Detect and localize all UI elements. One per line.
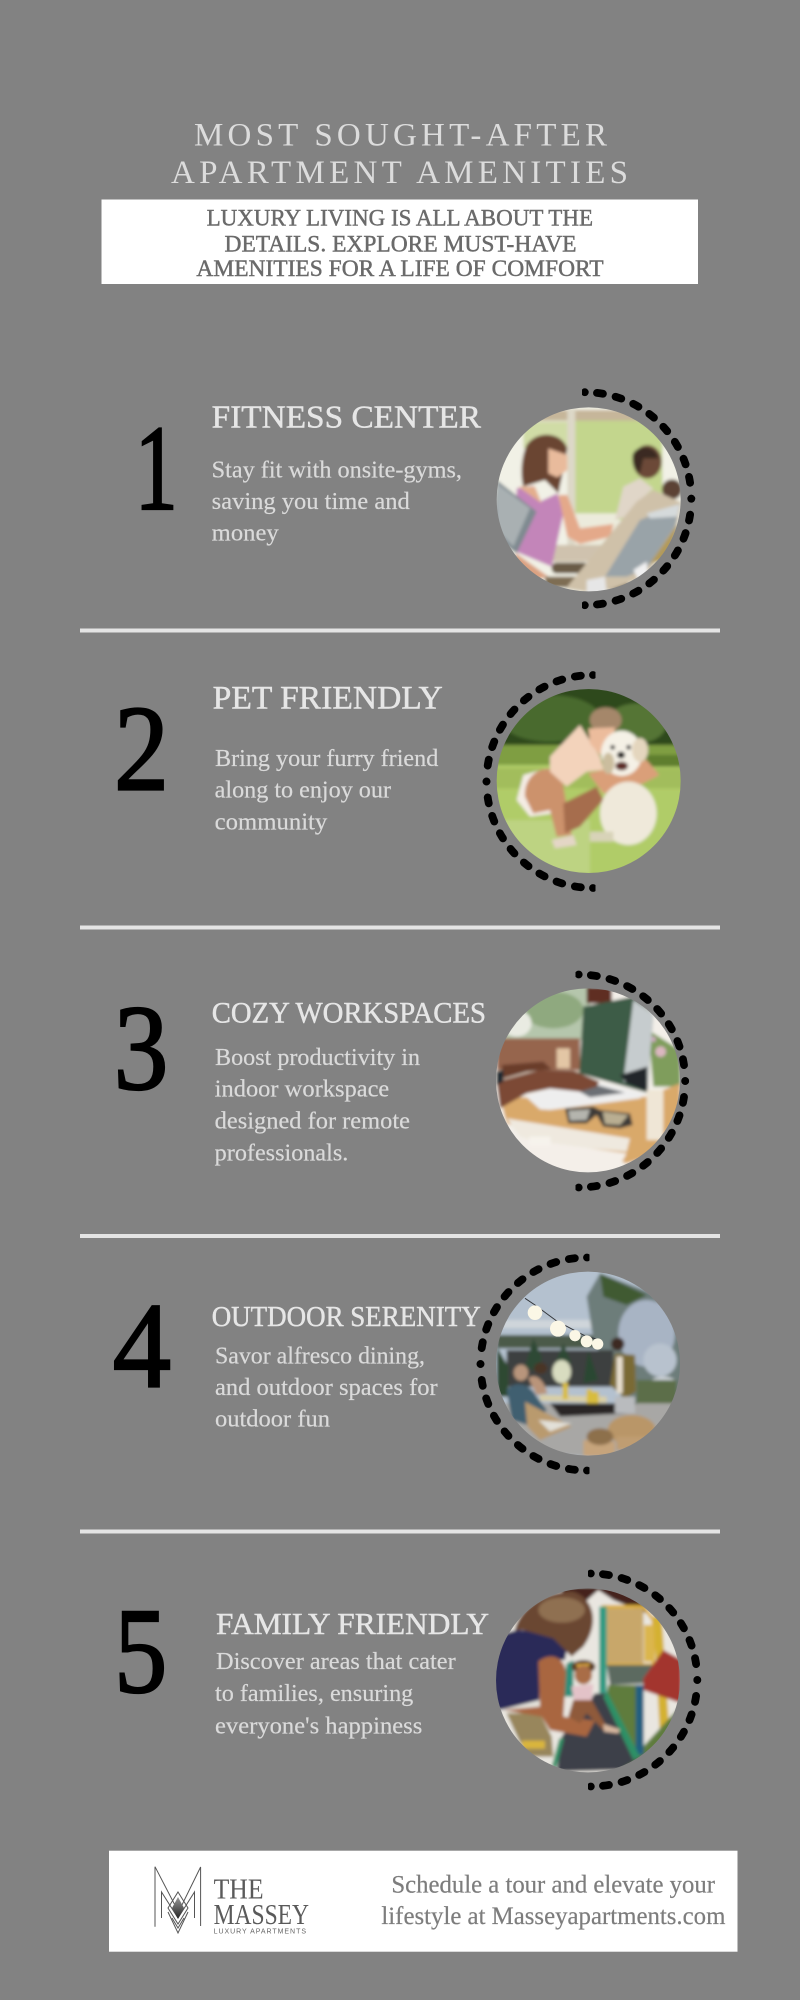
title xyxy=(171,117,628,191)
body text: outdoor serenity xyxy=(215,1343,438,1433)
heading: pet friendly: PET FRIENDLY xyxy=(213,680,443,716)
panel: outdoor serenity xyxy=(113,1258,683,1470)
body text: cozy workspaces: Boost productivity in xyxy=(215,1045,420,1071)
subtitle banner: LUXURY LIVING IS ALL ABOUT THE xyxy=(207,206,593,232)
string lights xyxy=(525,1298,603,1350)
logo: The Massey: MASSEY xyxy=(214,1900,309,1931)
photo: outdoor dining xyxy=(493,1268,683,1458)
photo: laptop on desk xyxy=(493,985,683,1175)
logo: The Massey: LUXURY APARTMENTS xyxy=(214,1928,306,1936)
body text: cozy workspaces: designed for remote xyxy=(215,1108,410,1134)
number 1: 1 xyxy=(135,401,178,536)
heading: family friendly: FAMILY FRIENDLY xyxy=(216,1606,489,1641)
body text: outdoor serenity: and outdoor spaces for xyxy=(215,1375,438,1401)
title: APARTMENT AMENITIES xyxy=(171,155,628,191)
title: MOST SOUGHT-AFTER xyxy=(194,117,607,153)
body text: pet friendly: community xyxy=(215,809,327,835)
number 5: 5 xyxy=(114,1584,167,1719)
body text: cozy workspaces: professionals. xyxy=(215,1141,348,1167)
body text: fitness center: Stay fit with onsite-gyms, xyxy=(212,458,462,484)
call to action xyxy=(381,1870,726,1930)
panel: pet friendly xyxy=(114,675,683,888)
body text: outdoor serenity: Savor alfresco dining, xyxy=(215,1343,425,1369)
body text: family friendly: Discover areas that cater xyxy=(216,1649,456,1675)
body text: pet friendly: Bring your furry friend xyxy=(215,746,438,772)
dotted ring xyxy=(579,974,685,1188)
photo: woman hugging dog xyxy=(493,687,683,877)
body text: fitness center: saving you time and xyxy=(212,489,410,515)
heading: outdoor serenity: OUTDOOR SERENITY xyxy=(212,1302,481,1333)
heading: fitness center: FITNESS CENTER xyxy=(212,398,482,434)
footer banner xyxy=(109,1851,738,1952)
subtitle banner: DETAILS. EXPLORE MUST-HAVE xyxy=(224,231,576,257)
dotted ring xyxy=(585,392,691,605)
logo mark xyxy=(155,1867,201,1933)
call to action: Schedule a tour and elevate your xyxy=(391,1870,715,1899)
number 3: 3 xyxy=(114,981,168,1116)
infographic page xyxy=(80,124,738,1952)
body text: family friendly: to families, ensuring xyxy=(215,1681,413,1707)
subtitle banner: AMENITIES FOR A LIFE OF COMFORT xyxy=(196,256,604,282)
body text: cozy workspaces: indoor workspace xyxy=(215,1077,389,1103)
dotted ring xyxy=(591,1574,697,1786)
body text: fitness center: money xyxy=(212,521,279,547)
number 4: 4 xyxy=(113,1278,171,1413)
panel: cozy workspaces xyxy=(114,974,685,1188)
panel: fitness center xyxy=(135,392,691,605)
call to action: lifestyle at Masseyapartments.com xyxy=(381,1901,726,1930)
photo: people on gym machines xyxy=(493,403,687,597)
dotted ring xyxy=(486,675,593,888)
body text: pet friendly: along to enjoy our xyxy=(215,778,391,804)
body text: outdoor serenity: outdoor fun xyxy=(215,1407,330,1433)
body text: pet friendly xyxy=(215,746,438,835)
body text: fitness center xyxy=(212,458,462,547)
body text: family friendly: everyone's happiness xyxy=(215,1713,422,1739)
panel: family friendly xyxy=(114,1574,697,1786)
heading: cozy workspaces: COZY WORKSPACES xyxy=(212,997,486,1030)
body text: cozy workspaces xyxy=(215,1045,420,1167)
photo: child on playground slide xyxy=(493,1585,683,1777)
number 2: 2 xyxy=(114,682,169,817)
body text: family friendly xyxy=(215,1649,456,1739)
dotted ring xyxy=(480,1258,587,1470)
subtitle banner xyxy=(102,200,698,284)
logo: The Massey: THE xyxy=(214,1874,264,1905)
logo: The Massey xyxy=(155,1867,309,1936)
